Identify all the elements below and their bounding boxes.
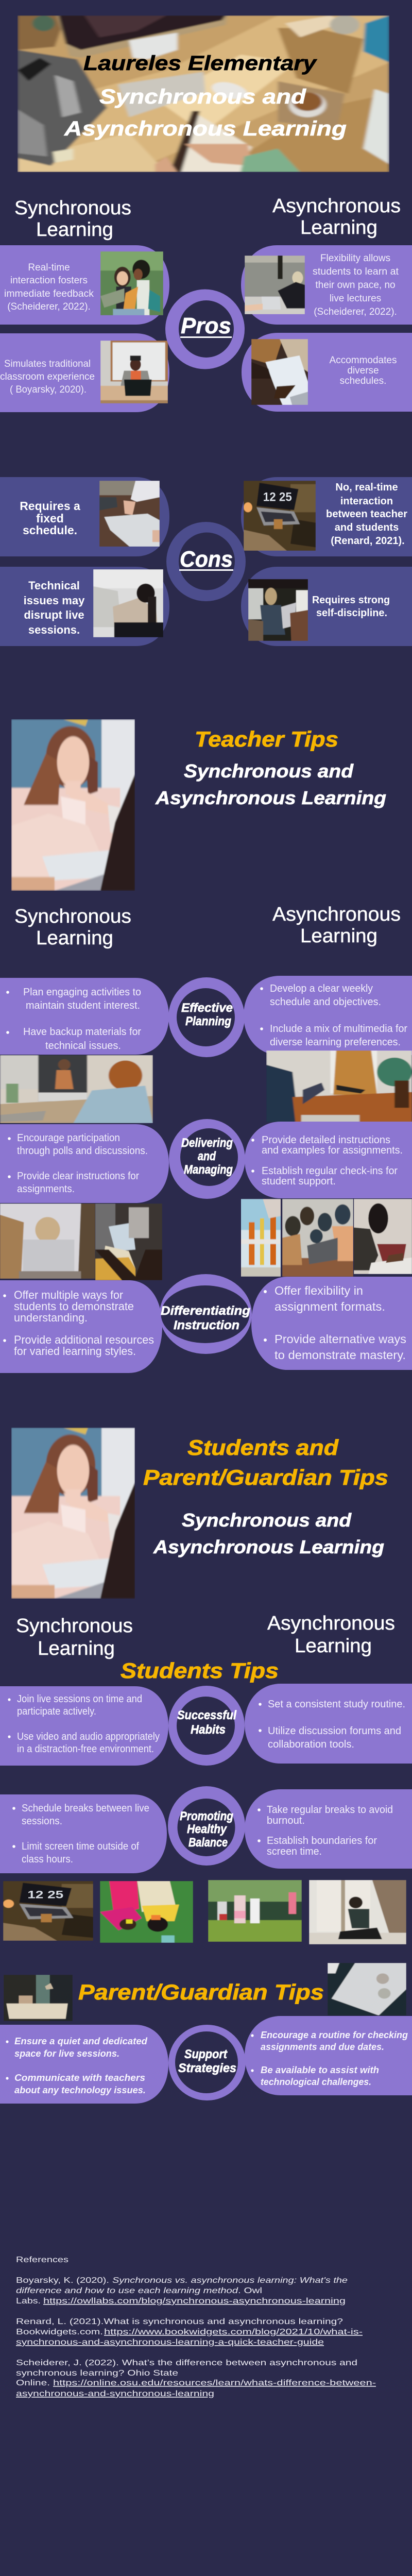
pros card: diverse schedules — [242, 333, 412, 412]
tips right: burnout. — [267, 1815, 305, 1826]
heading: parent/guardian tips: Parent/Guardian Tips — [143, 1465, 388, 1489]
photo: reading with a tablet — [95, 1204, 162, 1280]
tips right: schedule and objectives. — [270, 996, 381, 1008]
references — [16, 2256, 376, 2398]
references: Bookwidgets.com. — [16, 2328, 103, 2336]
column heading: asynchronous: Learning — [300, 217, 377, 239]
section: students and parent/guardian tips header — [11, 1428, 388, 1599]
tips right: Offer flexibility in — [274, 1284, 363, 1297]
tips right: Take regular breaks to avoid — [267, 1804, 393, 1816]
heading: students and: Students and — [187, 1435, 339, 1460]
cons card: no real-time interaction: No, real-time — [335, 482, 398, 493]
tips left — [0, 978, 169, 1055]
references: Online. — [16, 2379, 50, 2387]
pros card: flexibility — [241, 245, 412, 325]
tips left: Communicate with teachers — [14, 2073, 145, 2083]
subheading line 1: Synchronous and — [184, 760, 354, 782]
photo: teacher with headset — [11, 719, 135, 891]
cons card: technical issues: Technical — [28, 579, 80, 592]
pros card: diverse schedules: diverse — [347, 365, 379, 376]
references: References — [16, 2256, 68, 2264]
photo: student on the floor with laptop — [245, 256, 305, 314]
cons card: fixed schedule: fixed — [36, 512, 64, 525]
column heading: asynchronous — [272, 904, 401, 947]
pros card: flexibility: their own pace, no — [315, 280, 396, 291]
photo: children playing football — [208, 1880, 302, 1942]
tips left — [0, 1794, 167, 1873]
pros card: classroom experience: classroom experience — [0, 371, 95, 382]
tips right — [245, 1789, 412, 1869]
column heading: synchronous: Learning — [38, 1638, 115, 1659]
pros card: diverse schedules: schedules. — [340, 376, 386, 386]
tips left — [0, 1124, 169, 1203]
tips left: Encourage participation — [17, 1132, 120, 1144]
tips left: Ensure a quiet and dedicated — [14, 2036, 148, 2046]
badge: delivering and managing — [169, 1119, 245, 1199]
photo: children playing on the grass — [100, 1881, 193, 1943]
cons card: technical issues — [0, 567, 169, 646]
photo: teacher at a laptop — [100, 341, 168, 403]
panel: support strategies — [0, 2016, 412, 2104]
cons card: no real-time interaction: (Renard, 2021). — [331, 535, 405, 547]
tips right: Set a consistent study routine. — [268, 1699, 405, 1710]
tips left: Use video and audio appropriately — [17, 1731, 160, 1742]
badge: successful habits: Habits — [191, 1723, 226, 1737]
tips left: technical issues. — [45, 1040, 121, 1052]
tips left: Plan engaging activities to — [23, 987, 141, 998]
pros card: flexibility: students to learn at — [313, 266, 399, 277]
tips left: space for live sessions. — [14, 2048, 119, 2059]
badge: effective planning: Planning — [185, 1014, 231, 1028]
photo: desk with computer and notebook — [18, 15, 389, 172]
tips left: Join live sessions on time and — [17, 1693, 142, 1705]
pros card: flexibility: live lectures — [330, 293, 381, 304]
badge: differentiating instruction: Instruction — [174, 1318, 239, 1332]
photo: desk in a study — [4, 1975, 73, 2021]
panel: promoting healthy balance — [0, 1786, 412, 1873]
column heading: synchronous: Synchronous — [14, 906, 131, 927]
title: school name: Laureles Elementary — [83, 52, 317, 75]
tips right: Provide alternative ways — [274, 1332, 406, 1346]
badge: support strategies: Support — [184, 2047, 228, 2061]
tips right: diverse learning preferences. — [270, 1037, 401, 1048]
section: parent/guardian tips header — [4, 1963, 406, 2021]
subheading line 2: Asynchronous Learning — [153, 1536, 384, 1557]
column heading: synchronous: Synchronous — [14, 197, 131, 219]
tips right — [244, 976, 412, 1055]
references: synchronous learning? Ohio State — [16, 2369, 178, 2378]
tips left — [0, 1280, 162, 1373]
references: . Owl — [238, 2286, 262, 2295]
tips right: Utilize discussion forums and — [268, 1725, 401, 1737]
badge: cons — [166, 522, 246, 601]
badge: effective planning: Effective — [181, 1001, 233, 1015]
column heading: asynchronous — [267, 1613, 395, 1657]
references: Synchronous vs. asynchronous learning: What's the — [112, 2276, 348, 2285]
photo: laptop showing 12:25 — [244, 481, 316, 551]
badge: successful habits: Successful — [177, 1708, 237, 1722]
cons card: fixed schedule: Requires a — [20, 499, 80, 513]
pros card: classroom experience — [0, 333, 169, 412]
tips left: through polls and discussions. — [17, 1145, 148, 1157]
photo: woman by a window — [309, 1880, 406, 1944]
tips right: to demonstrate mastery. — [274, 1348, 406, 1362]
tips right — [245, 2016, 412, 2095]
badge: differentiating instruction: Differentiating — [161, 1304, 250, 1318]
tips right — [245, 1684, 412, 1764]
cons card: fixed schedule — [0, 477, 169, 556]
column heading: synchronous: Synchronous — [16, 1615, 133, 1637]
photo: people with tablet and phone — [266, 1050, 412, 1122]
section: teacher tips header — [11, 719, 386, 891]
badge: support strategies — [168, 2025, 246, 2100]
photo: child on a video call — [0, 1055, 153, 1123]
tips left: for varied learning styles. — [14, 1345, 136, 1358]
tips left — [0, 2025, 168, 2104]
tips left: students to demonstrate — [14, 1300, 134, 1313]
tips right: Include a mix of multimedia for — [270, 1023, 407, 1035]
column heading: asynchronous — [272, 195, 401, 239]
photo: calendar and glasses — [328, 1963, 406, 2015]
tips right: collaboration tools. — [268, 1739, 354, 1750]
cons card: technical issues: issues may — [24, 594, 85, 607]
photo: man with headphones writing — [354, 1199, 412, 1274]
panel: successful habits — [0, 1684, 412, 1766]
badge: delivering and managing: Delivering — [181, 1136, 233, 1150]
heading: students tips: Students Tips — [121, 1658, 279, 1683]
header: photo banner with title — [18, 15, 389, 172]
subheading line 1: Synchronous and — [182, 1510, 352, 1531]
tips left: about any technology issues. — [14, 2085, 146, 2095]
photo: two students with folders — [100, 251, 163, 315]
cons card: no real-time interaction: interaction — [340, 496, 393, 507]
tips right: Develop a clear weekly — [270, 983, 373, 994]
tips left: Offer multiple ways for — [14, 1289, 123, 1301]
pros card: real-time interaction: (Scheiderer, 2022). — [7, 301, 91, 312]
subheading line 2: Asynchronous Learning — [155, 787, 386, 808]
badge: promoting healthy balance — [168, 1786, 245, 1866]
tips right: Encourage a routine for checking — [261, 2030, 408, 2040]
tips left: maintain student interest. — [26, 1000, 140, 1011]
tips left: Provide additional resources — [14, 1333, 154, 1346]
tips right: Establish regular check-ins for — [262, 1165, 398, 1177]
photo: laptop showing 12:25 — [3, 1881, 93, 1941]
panel: cons — [0, 477, 412, 646]
tips left: Have backup materials for — [23, 1026, 141, 1038]
tips right: student support. — [262, 1176, 336, 1187]
photo: hands passing a document — [251, 339, 308, 405]
references: difference and how to use each learning method — [16, 2286, 238, 2295]
column heading: asynchronous: Learning — [295, 1635, 372, 1657]
references: https://owllabs.com/blog/synchronous-asynchronous-learning — [43, 2297, 346, 2306]
tips left: understanding. — [14, 1311, 88, 1324]
references: Scheiderer, J. (2022). What’s the difference between asynchronous and — [16, 2359, 357, 2367]
references: https://www.bookwidgets.com/blog/2021/10/what-is- — [104, 2328, 363, 2336]
title: topic line 2: Asynchronous Learning — [64, 117, 347, 140]
badge: cons: Cons — [180, 547, 233, 572]
tips right: Establish boundaries for — [267, 1835, 377, 1846]
tips left: Schedule breaks between live — [22, 1803, 149, 1814]
references: asynchronous-and-synchronous-learning — [16, 2389, 214, 2398]
pros card: classroom experience: ( Boyarsky, 2020). — [10, 384, 87, 395]
references: Renard, L. (2021).What is synchronous and asynchronous learning? — [16, 2317, 343, 2326]
photo: stressed person on a sofa — [93, 569, 163, 637]
tips left: participate actively. — [17, 1706, 96, 1717]
badge: pros — [165, 290, 245, 369]
tips left: Limit screen time outside of — [22, 1841, 139, 1852]
tips right: assignment formats. — [274, 1300, 385, 1313]
cons card: self-discipline: self-discipline. — [316, 607, 387, 619]
badge: delivering and managing: Managing — [184, 1163, 233, 1177]
cons card: self-discipline — [241, 567, 412, 646]
column heading: synchronous — [14, 197, 131, 241]
references: Boyarsky, K. (2020). — [16, 2276, 109, 2285]
heading: parent/guardian tips: Parent/Guardian Tips — [78, 1980, 324, 2004]
tips right — [245, 1122, 412, 1198]
references: Labs. — [16, 2297, 41, 2306]
column heading: synchronous — [14, 906, 131, 949]
column heading: synchronous — [16, 1615, 133, 1659]
column heading: asynchronous: Asynchronous — [272, 195, 401, 217]
pros card: classroom experience: Simulates traditional — [4, 359, 91, 369]
cons card: technical issues: disrupt live — [24, 608, 84, 621]
tips left — [0, 1686, 168, 1766]
badge: pros: Pros — [181, 313, 231, 338]
photo: woman at laptop among books — [0, 1204, 95, 1279]
badge: differentiating instruction — [160, 1274, 252, 1354]
references: https://online.osu.edu/resources/learn/whats-difference-between- — [53, 2379, 376, 2387]
pros card: flexibility: Flexibility allows — [320, 253, 390, 264]
column heading: asynchronous: Learning — [300, 925, 377, 947]
photo: woman with a laptop in a car — [248, 579, 308, 641]
tips right — [251, 1277, 412, 1370]
panel: differentiating instruction — [0, 1274, 412, 1373]
cons card: fixed schedule: schedule. — [23, 523, 77, 537]
column heading: asynchronous: Asynchronous — [272, 904, 401, 925]
column heading: synchronous: Learning — [36, 219, 113, 241]
badge: delivering and managing: and — [198, 1149, 216, 1163]
column heading: synchronous: Learning — [36, 927, 113, 949]
badge: promoting healthy balance: Healthy — [187, 1822, 227, 1836]
cons card: no real-time interaction: and students — [335, 522, 399, 533]
photo: teacher with headset — [11, 1428, 135, 1599]
column heading: asynchronous: Asynchronous — [267, 1613, 395, 1634]
heading: teacher tips: Teacher Tips — [195, 727, 338, 751]
panel: pros — [0, 245, 412, 412]
badge: effective planning — [168, 977, 245, 1057]
tips right: Be available to assist with — [261, 2065, 379, 2075]
photo: test tubes — [241, 1199, 281, 1277]
cons card: self-discipline: Requires strong — [312, 595, 390, 606]
tips right: and examples for assignments. — [262, 1145, 403, 1156]
cons card: no real-time interaction — [241, 477, 412, 556]
tips right: Provide detailed instructions — [262, 1134, 390, 1146]
panel: effective planning — [0, 976, 412, 1123]
panel: delivering and managing — [0, 1119, 412, 1280]
tips right: screen time. — [267, 1846, 322, 1857]
tips left: in a distraction-free environment. — [17, 1743, 154, 1755]
tips left: assignments. — [17, 1183, 75, 1195]
tips left: Provide clear instructions for — [17, 1171, 139, 1182]
badge: promoting healthy balance: Balance — [188, 1836, 228, 1850]
tips left: class hours. — [22, 1854, 73, 1865]
title: topic line 1: Synchronous and — [99, 86, 307, 108]
tips left: sessions. — [22, 1816, 62, 1827]
pros card: real-time interaction: interaction fosters — [10, 275, 88, 286]
badge: support strategies: Strategies — [178, 2061, 236, 2075]
photo: hand marking a calendar — [99, 481, 160, 547]
tips right: technological challenges. — [261, 2077, 371, 2087]
pros card: real-time interaction: Real-time — [28, 262, 70, 273]
pros card: flexibility: (Scheiderer, 2022). — [314, 307, 397, 317]
photo: children around a laptop — [282, 1199, 353, 1277]
references: synchronous-and-asynchronous-learning-a-quick-teacher-guide — [16, 2338, 324, 2347]
pros card: real-time interaction — [0, 245, 169, 325]
cons card: no real-time interaction: between teacher — [326, 509, 407, 520]
tips right: assignments and due dates. — [261, 2042, 384, 2052]
pros card: real-time interaction: immediate feedback — [4, 289, 94, 299]
photo row: healthy balance — [3, 1880, 406, 1944]
pros card: diverse schedules: Accommodates — [330, 355, 397, 366]
cons card: technical issues: sessions. — [28, 623, 80, 636]
badge: successful habits — [168, 1686, 245, 1766]
badge: promoting healthy balance: Promoting — [180, 1809, 233, 1823]
